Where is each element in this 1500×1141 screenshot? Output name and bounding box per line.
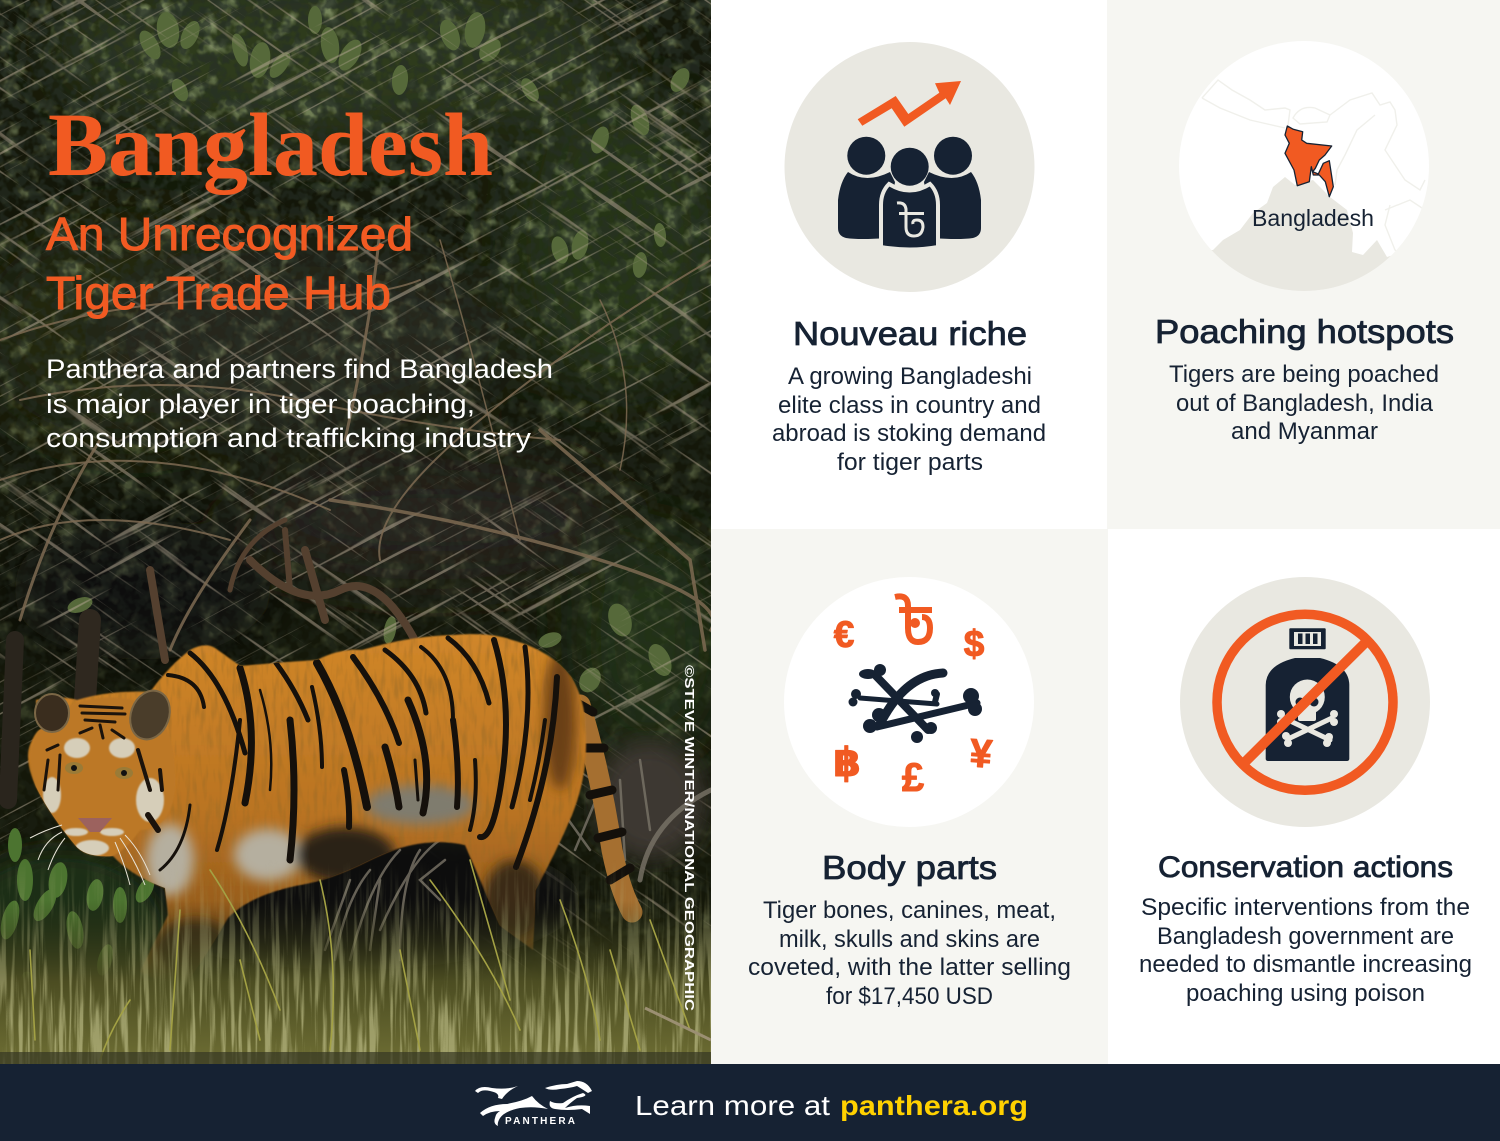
body text	[748, 897, 1071, 1010]
footer bar	[0, 1064, 1500, 1141]
left-bottom green leaves	[0, 828, 168, 974]
intro text: consumption and trafficking industry	[46, 423, 532, 453]
body text: Bangladesh government are	[1157, 923, 1454, 950]
body text: A growing Bangladeshi	[788, 363, 1032, 390]
body text: Tiger bones, canines, meat,	[763, 897, 1056, 924]
icon: bones and currency symbols: ฿	[833, 740, 861, 786]
body text: and Myanmar	[1231, 418, 1378, 445]
subtitle: Tiger Trade Hub	[46, 267, 391, 319]
call to action: Learn more at	[635, 1090, 830, 1121]
whiskers	[30, 825, 150, 885]
icon: bones and currency symbols: €	[834, 614, 854, 655]
tiger	[20, 630, 640, 1000]
icon: bones and currency symbols: $	[964, 623, 985, 664]
foreground grass	[0, 840, 711, 1064]
panel: poaching hotspots	[1107, 0, 1500, 529]
tiger face	[30, 698, 175, 862]
icon: map of Bangladesh	[1179, 41, 1430, 300]
body text: Tigers are being poached	[1169, 361, 1439, 388]
body text	[772, 363, 1046, 476]
subtitle: An Unrecognized	[46, 208, 413, 260]
icon: bones and currency symbols: £	[902, 756, 924, 800]
panel: nouveau riche	[711, 0, 1107, 529]
intro text	[46, 354, 553, 453]
footer bar: panthera.org	[840, 1090, 1028, 1121]
icon: bones and currency symbols: ¥	[968, 731, 994, 777]
body text	[1169, 361, 1439, 445]
body text: abroad is stoking demand	[772, 420, 1046, 447]
twig texture	[0, 0, 711, 974]
intro text: Panthera and partners find Bangladesh	[46, 354, 553, 384]
heading: Nouveau riche	[793, 315, 1027, 352]
subtitle	[46, 208, 413, 319]
stripes	[160, 638, 557, 870]
title: Bangladesh	[48, 96, 493, 195]
map label: Bangladesh	[1252, 205, 1374, 231]
panel: body parts	[711, 529, 1108, 1064]
icon: bones and currency symbols	[784, 577, 1034, 827]
panel: conservation actions	[1108, 529, 1500, 1064]
body text: elite class in country and	[778, 392, 1041, 419]
body text: for $17,450 USD	[826, 983, 993, 1010]
undergrowth behind the tiger	[120, 740, 711, 970]
body text: poaching using poison	[1186, 980, 1425, 1007]
icon: wealthy people with rising arrow	[784, 42, 1034, 292]
heading: Conservation actions	[1158, 851, 1453, 884]
icon: crossed-out poison bottle	[1180, 577, 1430, 827]
body text: coveted, with the latter selling	[748, 954, 1071, 981]
leaf clusters	[65, 6, 693, 696]
body text	[1139, 894, 1472, 1007]
body text: needed to dismantle increasing	[1139, 951, 1472, 978]
intro text: is major player in tiger poaching,	[46, 389, 475, 419]
logo: Panthera: PANTHERA	[505, 1116, 575, 1127]
logo: Panthera	[475, 1081, 592, 1127]
heading: Body parts	[822, 849, 997, 886]
tiger ears	[34, 690, 171, 740]
photo credit: ©STEVE WINTER/NATIONAL GEOGRAPHIC	[682, 665, 696, 1011]
body text: out of Bangladesh, India	[1176, 390, 1434, 417]
heading: Poaching hotspots	[1155, 313, 1454, 350]
photo: tiger in mangrove forest	[0, 0, 711, 1064]
body text: for tiger parts	[837, 449, 983, 476]
body text: Specific interventions from the	[1141, 894, 1470, 921]
body text: milk, skulls and skins are	[779, 926, 1040, 953]
branches	[0, 230, 713, 650]
tail	[572, 700, 632, 912]
